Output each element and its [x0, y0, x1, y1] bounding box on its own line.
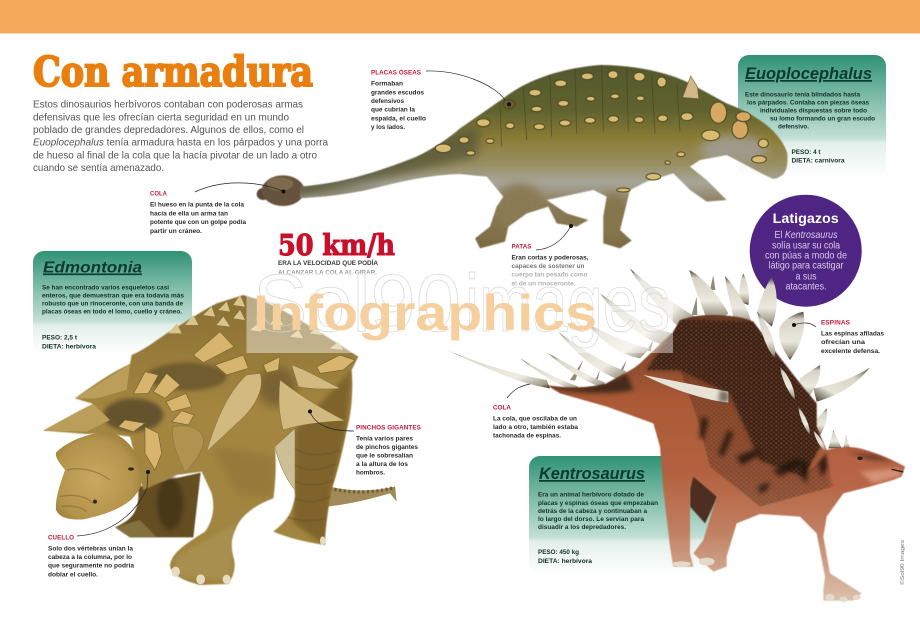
callout: placas oseas [371, 68, 505, 131]
species name: Kentrosaurus: Kentrosaurus [539, 464, 645, 483]
callout: espinas: ofrecían una [821, 339, 865, 346]
illustration: Euoplocephalus [257, 65, 787, 248]
card description: defensivo. [778, 123, 809, 130]
shoulder spikes [173, 365, 345, 490]
card description: lo largo del dorso. Le servían para [538, 516, 644, 523]
callout: cola kentrosaurus: tachonada de espinas. [493, 432, 561, 440]
stat: 50 km/h: ERA LA VELOCIDAD QUE PODÍA [278, 258, 378, 267]
shoulder spike [683, 76, 699, 99]
intro text block: Estos dinosaurios herbívoros contaban con poderosas armas [33, 100, 303, 110]
callout: patas: PATAS [512, 244, 532, 250]
head details [857, 457, 903, 472]
body [547, 315, 905, 601]
callout: cola: COLA [150, 190, 167, 198]
callout: placas oseas: grandes escudos [371, 90, 424, 96]
card description: Era un animal herbívoro dotado de [538, 491, 644, 498]
panel: Latigazos circle [750, 195, 862, 307]
callout: cola kentrosaurus [493, 384, 578, 440]
callout: cuello [48, 470, 150, 578]
card stats [792, 149, 845, 164]
card stats [42, 334, 96, 350]
callout: placas oseas: defensivos [371, 98, 404, 105]
card description: su lomo formando un gran escudo [770, 115, 875, 122]
tail and back spines [447, 268, 695, 391]
callout: pinchos gigantes: a la altura de los [356, 461, 408, 468]
callout: pinchos gigantes: que le sobresalían [356, 452, 413, 460]
tail [325, 487, 397, 507]
scaly back texture [647, 320, 820, 477]
card stats: PESO: 450 kg [538, 549, 579, 556]
callout: espinas: Las espinas afiladas [821, 330, 884, 338]
callout: patas [512, 224, 589, 288]
callout: cola: partir un cráneo. [150, 228, 202, 235]
card description: placas y espinas óseas que empezaban [538, 500, 658, 507]
intro text block: cuando se sentía amenazado. [33, 163, 164, 174]
body [43, 295, 358, 585]
back spines [168, 295, 343, 350]
Latigazos text: atacantes. [786, 282, 826, 292]
callout: placas oseas: PLACAS ÓSEAS [371, 68, 421, 76]
stat: 50 km/h: 50 km/h [278, 228, 395, 262]
body [293, 65, 787, 248]
callout: cola: hacía de ella un arma tan [150, 210, 228, 218]
far leg [690, 473, 718, 523]
armour scutes [435, 71, 768, 192]
intro text block: de hueso al final de la cola que la hacía pivotar de un lado a otro [33, 150, 317, 161]
card description: placas óseas en todo el lomo, cuello y cráneo. [42, 308, 182, 316]
Latigazos heading: Latigazos [773, 210, 839, 226]
callout: pinchos gigantes: Tenía varios pares [356, 436, 413, 442]
head [56, 432, 142, 519]
card description: individuales dispuestas sobre todo [760, 107, 867, 114]
card description: Este dinosaurio tenía blindados hasta [745, 91, 860, 98]
card stats: PESO: 2,5 t [42, 334, 78, 342]
image credit: ©Sol90 Images [899, 540, 906, 585]
callout: patas: cuerpo tan pesado como [512, 272, 588, 278]
species name: Euoplocephalus: Euoplocephalus [745, 64, 872, 83]
card description: Se han encontrado varios esqueletos casi [42, 284, 169, 292]
dark hump [647, 320, 820, 477]
card description [745, 91, 875, 130]
stat: 50 km/h: ALCANZAR LA COLA AL GIRAR. [278, 270, 377, 276]
callout: cuello: doblar el cuello. [48, 572, 98, 578]
card description: detrás de la cabeza y continuaban a [538, 508, 647, 515]
watermark: images [465, 258, 670, 349]
watermark: Sol90 [253, 258, 461, 349]
intro text block [33, 100, 328, 174]
callout: pinchos gigantes: hombros. [356, 470, 385, 476]
callout: cola kentrosaurus: lado a otro, también estaba [493, 424, 578, 431]
callout: cuello: cabeza a la columna, por lo [48, 554, 132, 561]
callout: cola: potente que con un golpe podía [150, 219, 246, 226]
dark far leg [115, 473, 201, 537]
callout: placas oseas: que cubrían la [371, 106, 415, 114]
callout: espinas [792, 320, 884, 355]
marker dot [507, 102, 511, 106]
callout: patas: el de un rinoceronte. [512, 280, 576, 288]
intro text block: Euoplocephalus tenía armadura hasta en los párpados y una porra [33, 138, 328, 149]
card stats: DIETA: carnívora [792, 158, 845, 164]
armour plates [118, 332, 355, 470]
panel: Edmontonia card [33, 251, 192, 354]
illustration: Edmontonia [43, 295, 397, 585]
callout: cuello: CUELLO [48, 534, 74, 542]
callout: placas oseas: espalda, el cuello [371, 116, 426, 122]
callout: pinchos gigantes: de pinchos gigantes [356, 444, 418, 451]
callout: espinas: excelente defensa. [821, 348, 880, 355]
illustration: Kentrosaurus [447, 268, 905, 602]
tail club [257, 175, 304, 206]
card description: los párpados. Contaba con piezas óseas [747, 99, 869, 106]
card description: enteros, que demuestran que era todavía más [42, 292, 184, 300]
flank spike [643, 375, 728, 403]
panel: Kentrosaurus card [529, 456, 719, 575]
card stats: DIETA: herbívora [538, 558, 592, 565]
card description: disuadir a los depredadores. [538, 524, 626, 531]
intro text block: poblado de grandes depredadores. Algunos de ellos, como el [33, 125, 304, 136]
callout: patas: Eran cortas y poderosas, [512, 254, 589, 262]
watermark [246, 258, 673, 353]
Latigazos text: solía usar su cola [772, 240, 840, 252]
feet [672, 558, 861, 602]
Latigazos text: a sus [796, 272, 816, 282]
stat: 50 km/h [278, 228, 395, 276]
card description [42, 284, 184, 316]
spines over the body [757, 312, 826, 452]
callout: placas oseas: Formaban [371, 80, 403, 88]
card stats [538, 549, 592, 565]
card description: robusto que un rinoceronte, con una banda de [42, 300, 183, 308]
neck spikes [43, 364, 130, 432]
Latigazos text: látigo para castigar [768, 260, 844, 272]
watermark: Infographics [253, 285, 597, 341]
callout: pinchos gigantes [308, 410, 421, 476]
callout: patas: capaces de sostener un [512, 263, 584, 270]
intro text block: defensivas que les ofrecían cierta seguridad en un mundo [33, 112, 289, 123]
callout: placas oseas: y los lados. [371, 124, 405, 131]
body stripes [500, 65, 680, 147]
callout: espinas: ESPINAS [821, 320, 850, 326]
callout: cuello: que seguramente no podría [48, 562, 134, 570]
small struts [570, 275, 715, 385]
callout: pinchos gigantes: PINCHOS GIGANTES [356, 424, 421, 432]
panel: Euoplocephalus card [738, 55, 886, 177]
toes [171, 536, 325, 584]
callout: cola [150, 183, 286, 235]
top orange band [0, 0, 920, 34]
title: Con armadura [33, 48, 313, 96]
callout: cola: El hueso en la punta de la cola [150, 202, 244, 208]
card stats: DIETA: herbívora [42, 344, 96, 350]
Latigazos text: con púas a modo de [765, 250, 847, 262]
Latigazos text: El Kentrosaurus [774, 230, 838, 241]
callout: cola kentrosaurus: La cola, que oscilaba de un [493, 416, 577, 422]
callout: cola kentrosaurus: COLA [493, 404, 511, 412]
species name: Edmontonia: Edmontonia [43, 260, 142, 276]
callout: cuello: Solo dos vértebras unían la [48, 546, 133, 552]
card description [538, 491, 658, 531]
card stats: PESO: 4 t [792, 149, 821, 156]
Latigazos text [765, 230, 847, 292]
